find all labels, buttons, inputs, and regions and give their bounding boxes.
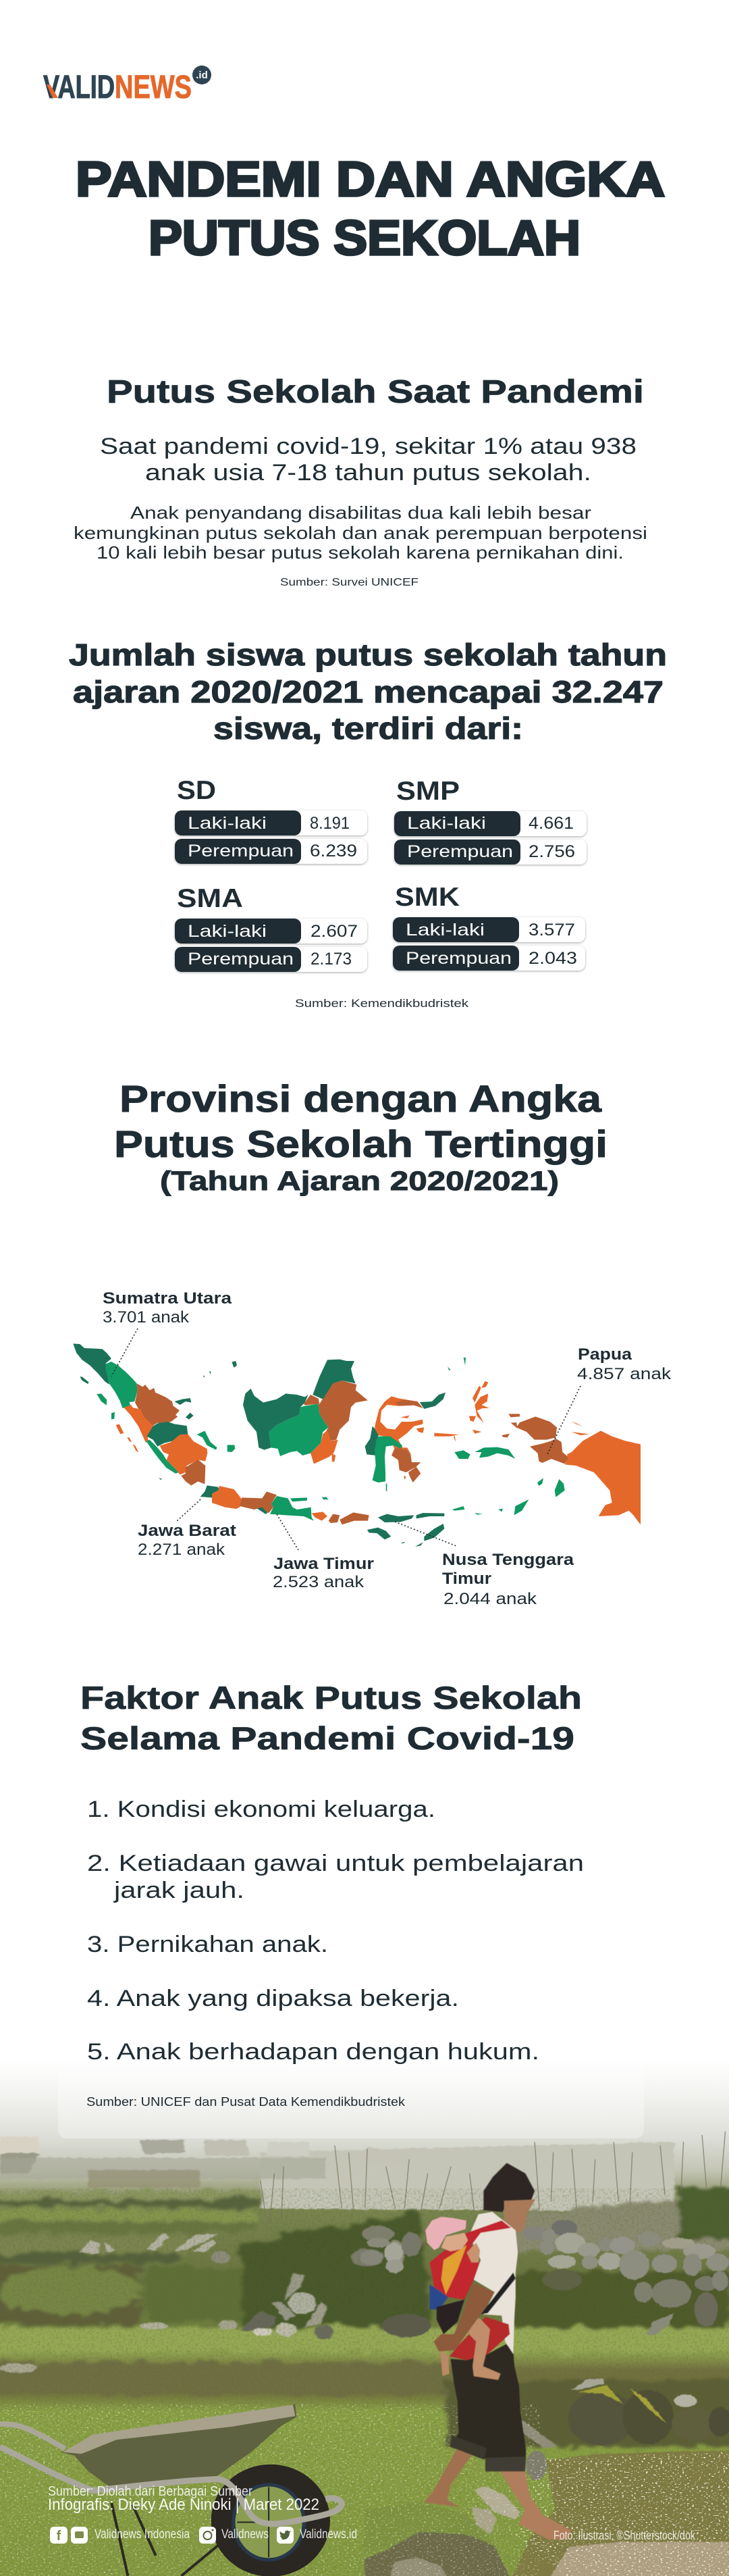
lead text: Saat pandemi covid-19, sekitar 1% atau 938 (100, 434, 637, 459)
heading: jumlah siswa: Jumlah siswa putus sekolah tahun (69, 638, 667, 672)
heading: provinsi: Putus Sekolah Tertinggi (114, 1123, 608, 1165)
heading: faktor: Faktor Anak Putus Sekolah (80, 1680, 582, 1716)
photo: boy carrying baby (424, 2199, 572, 2540)
panel: putus sekolah saat pandemi (74, 374, 647, 588)
panel: SMA: 2.607 (310, 922, 358, 941)
handle: twitter: Validnews.id (300, 2527, 357, 2542)
panel: SMP: Perempuan (407, 842, 513, 861)
panel: SMA: SMA (177, 884, 243, 913)
heading: faktor: Selama Pandemi Covid-19 (80, 1720, 574, 1756)
label: Papua: 4.857 anak (577, 1365, 672, 1383)
heading: jumlah siswa: ajaran 2020/2021 mencapai 32.247 (73, 675, 664, 709)
icon: youtube (71, 2527, 88, 2544)
label: Sumatra Utara: Sumatra Utara (103, 1289, 232, 1308)
panel: SMK: SMK (395, 883, 460, 912)
list: faktor putus sekolah: 1. Kondisi ekonomi keluarga. (87, 1797, 435, 1822)
panel: SMK: 3.577 (529, 921, 575, 939)
photo credit: Foto: Ilustrasi. ©Shutterstock/dok (554, 2529, 696, 2542)
label: Jawa Barat: 2.271 anak (138, 1541, 225, 1559)
photo: hazy village and terraces (0, 2132, 729, 2447)
photo: grain texture (0, 2188, 729, 2576)
list: faktor putus sekolah: 4. Anak yang dipaksa bekerja. (87, 1986, 459, 2011)
panel: SMP (394, 777, 587, 865)
panel: SD: SD (177, 776, 216, 805)
panel: SMP: 4.661 (529, 814, 574, 833)
panel: SMP: Laki-laki (407, 814, 486, 833)
panel: SD: 6.239 (310, 842, 357, 860)
title (76, 153, 665, 265)
label: Sumatra Utara (103, 1289, 232, 1326)
map: dotted leader lines (111, 1329, 580, 1550)
footer credits: Sumber: Diolah dari Berbagai Sumber (48, 2484, 252, 2499)
logo: Validnews.id (43, 66, 211, 105)
list: faktor putus sekolah: 2. Ketiadaan gawai untuk pembelajaran (87, 1851, 584, 1876)
panel: SD (175, 776, 367, 864)
title: PUTUS SEKOLAH (148, 211, 580, 265)
logo: Validnews.id: VALID (43, 70, 115, 105)
label: Jawa Timur: 2.523 anak (273, 1573, 364, 1591)
icon: instagram (199, 2527, 216, 2544)
panel: SMA (175, 884, 367, 972)
footer credits (48, 2484, 319, 2514)
panel: SMP: 2.756 (529, 842, 575, 861)
panel: SMK: Perempuan (406, 949, 512, 968)
label: Sumatra Utara: 3.701 anak (103, 1308, 190, 1326)
panel: SMA: Laki-laki (188, 922, 267, 941)
panel: SMP: SMP (396, 777, 460, 806)
map: Indonesia provinces (73, 1289, 672, 1608)
map: western Indonesia (73, 1343, 369, 1524)
icon: twitter (277, 2527, 294, 2544)
photo: water sparkle (500, 2452, 729, 2576)
heading: provinsi: Provinsi dengan Angka (119, 1077, 602, 1120)
label: Nusa Tenggara Timur (442, 1551, 574, 1608)
source: unicef: Sumber: UNICEF dan Pusat Data Kemendikbudristek (86, 2095, 406, 2109)
source: kemendikbudristek: Sumber: Kemendikbudristek (295, 997, 469, 1010)
body text (74, 503, 647, 563)
panel: SD: Laki-laki (188, 814, 267, 833)
heading: jumlah siswa: siswa, terdiri dari: (213, 711, 523, 746)
photo: terrace and field rocks (0, 2225, 430, 2373)
list: faktor putus sekolah: 3. Pernikahan anak. (87, 1932, 328, 1957)
map: eastern Indonesia (322, 1358, 641, 1547)
heading: faktor (80, 1680, 582, 1756)
logo: Validnews.id: .id (196, 70, 208, 81)
label: Jawa Timur: Jawa Timur (273, 1555, 374, 1573)
title: PANDEMI DAN ANGKA (76, 153, 665, 207)
panel: SMK: 2.043 (529, 949, 577, 968)
list: faktor putus sekolah (87, 1797, 584, 2065)
list: faktor putus sekolah: 5. Anak berhadapan dengan hukum. (87, 2039, 539, 2065)
body text: Anak penyandang disabilitas dua kali lebih besar (130, 503, 591, 523)
icon: facebook (50, 2527, 68, 2544)
panel: SD: 8.191 (310, 814, 350, 833)
photo: reeds (261, 2132, 726, 2226)
label: Papua: Papua (578, 1345, 632, 1364)
body text: 10 kali lebih besar putus sekolah karena pernikahan dini. (97, 542, 624, 563)
heading: provinsi: (Tahun Ajaran 2020/2021) (160, 1166, 559, 1196)
panel: SMA: Perempuan (188, 950, 294, 969)
handle: instagram: Validnews (221, 2527, 269, 2542)
label: Nusa Tenggara Timur: 2.044 anak (443, 1590, 537, 1608)
footer credits: Infografis: Dieky Ade Ninoki | Maret 2022 (48, 2496, 319, 2514)
photo: wheelbarrow (0, 2163, 535, 2576)
heading: provinsi (114, 1077, 608, 1196)
panel: SD: Perempuan (188, 842, 294, 860)
logo: Validnews.id: NEWS (115, 70, 192, 105)
lead text (100, 434, 637, 486)
handle: facebook and youtube: Validnews Indonesia (94, 2527, 190, 2542)
translucent content panel (58, 1959, 644, 2138)
heading: jumlah siswa (69, 638, 667, 746)
social icons and handles (50, 2527, 357, 2544)
label: Nusa Tenggara Timur: Timur (442, 1570, 491, 1588)
panel: SMA: 2.173 (310, 950, 352, 969)
photo: stone wall, boulders and water (360, 2220, 729, 2576)
photo: grass sparkle (0, 2404, 540, 2576)
label: Jawa Timur (273, 1555, 374, 1591)
lead text: anak usia 7-18 tahun putus sekolah. (145, 460, 591, 486)
background photo: boy carrying baby in rice terraces (0, 2026, 729, 2576)
body text: kemungkinan putus sekolah dan anak perempuan berpotensi (74, 523, 647, 543)
icon: facebook: f (57, 2529, 61, 2544)
label: Papua (577, 1345, 672, 1383)
panel: SMK (393, 883, 585, 971)
list: faktor putus sekolah: jarak jauh. (113, 1878, 244, 1903)
label: Nusa Tenggara Timur: Nusa Tenggara (442, 1551, 574, 1569)
panel: SMK: Laki-laki (406, 921, 485, 939)
heading: Putus Sekolah Saat Pandemi (107, 374, 644, 410)
label: Jawa Barat: Jawa Barat (138, 1522, 236, 1540)
source: Sumber: Survei UNICEF (280, 577, 418, 588)
label: Jawa Barat (138, 1522, 236, 1559)
